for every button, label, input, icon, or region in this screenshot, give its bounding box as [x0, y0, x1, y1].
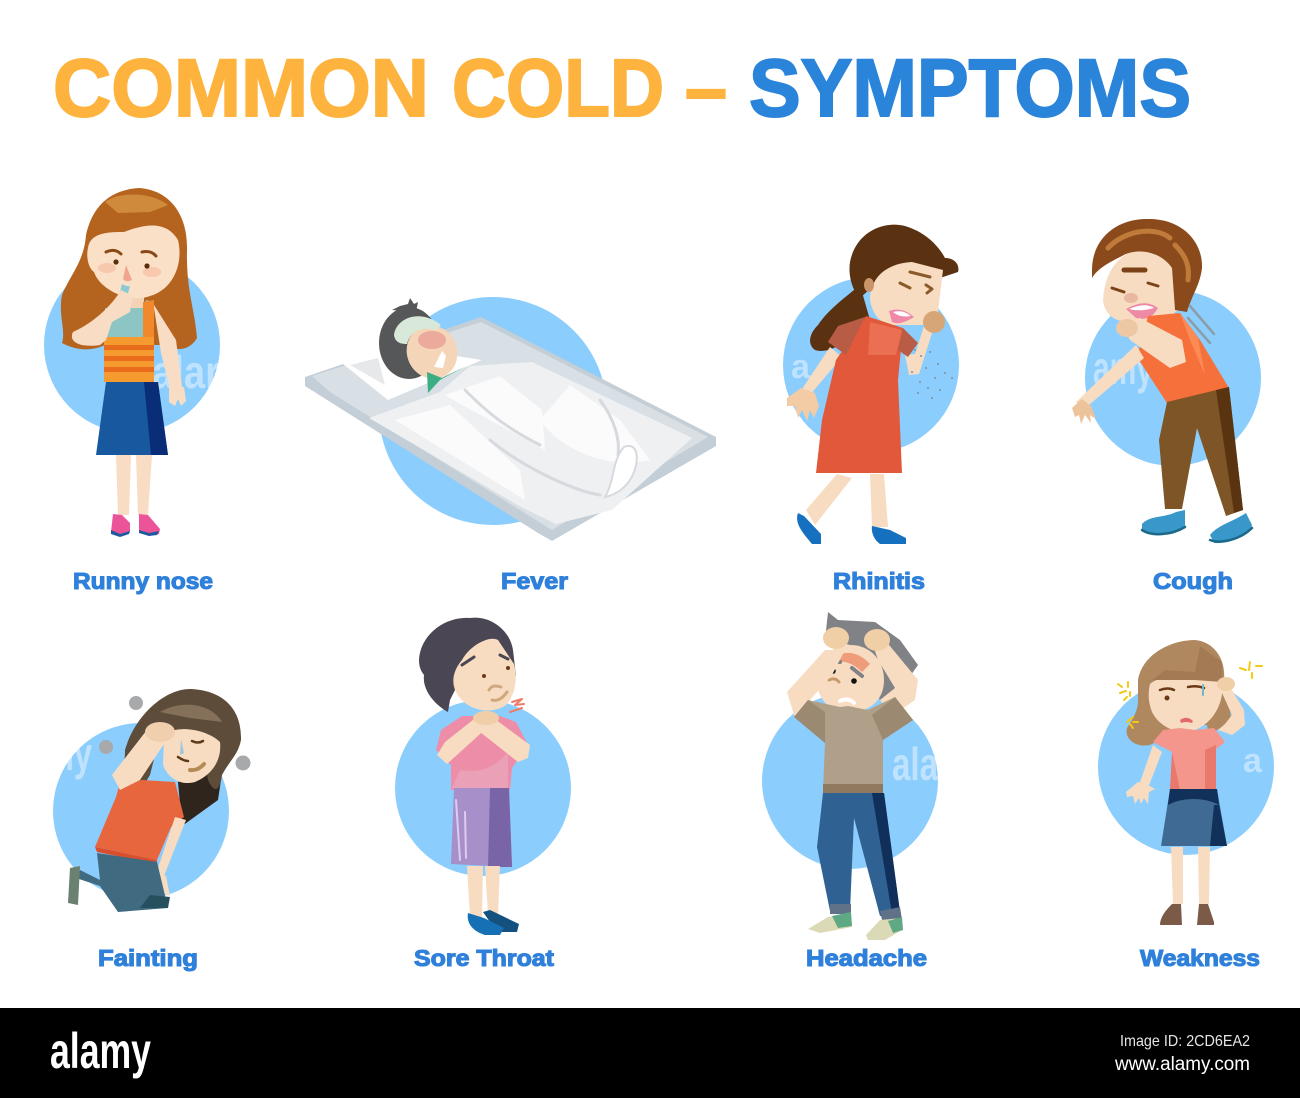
alamy logo: alamy [50, 1023, 151, 1079]
label: runny nose: Runny nose [73, 568, 213, 594]
label: cough: Cough [1153, 568, 1233, 594]
title [53, 43, 1191, 134]
watermark: ala [892, 738, 938, 790]
panel: headache [762, 612, 938, 971]
title: COMMON [53, 43, 429, 134]
girl with tissue [61, 188, 197, 537]
watermark: ny [54, 728, 92, 780]
watermark: alar [152, 346, 220, 398]
blue circle [762, 693, 938, 869]
weak girl [1118, 640, 1262, 925]
label: rhinitis: Rhinitis [833, 568, 925, 594]
blue circle [379, 297, 607, 525]
title: SYMPTOMS [749, 43, 1191, 134]
panel: fever [305, 297, 716, 594]
title: COLD [452, 43, 664, 134]
man holding head [787, 612, 918, 940]
blue circle [1098, 679, 1274, 855]
blue circle [783, 277, 959, 453]
blue circle [1085, 290, 1261, 466]
label: sore throat: Sore Throat [414, 945, 554, 971]
image id: Image ID: 2CD6EA2 [1120, 1033, 1250, 1050]
website: www.alamy.com [1114, 1054, 1250, 1075]
label: fever: Fever [501, 568, 568, 594]
watermark: amy [1093, 342, 1153, 394]
panel: runny nose [44, 188, 220, 594]
watermark: a [791, 348, 811, 386]
person in bed [305, 298, 716, 541]
panel: rhinitis [783, 225, 959, 594]
label: fainting: Fainting [98, 945, 198, 971]
sneezing girl [787, 225, 958, 544]
panel: fainting [53, 689, 250, 971]
kneeling girl [68, 689, 250, 912]
blue circle [53, 723, 229, 899]
blue circle [395, 700, 571, 876]
blue circle [44, 257, 220, 433]
watermark: a [1243, 742, 1263, 780]
label: weakness: Weakness [1140, 945, 1260, 971]
panel: cough [1072, 219, 1261, 594]
coughing boy [1072, 219, 1252, 543]
panel: weakness [1098, 640, 1274, 971]
woman holding throat [419, 618, 530, 935]
label: headache: Headache [806, 945, 927, 971]
footer bar [0, 1008, 1300, 1098]
title: – [685, 43, 727, 134]
panel: sore throat [395, 618, 571, 971]
